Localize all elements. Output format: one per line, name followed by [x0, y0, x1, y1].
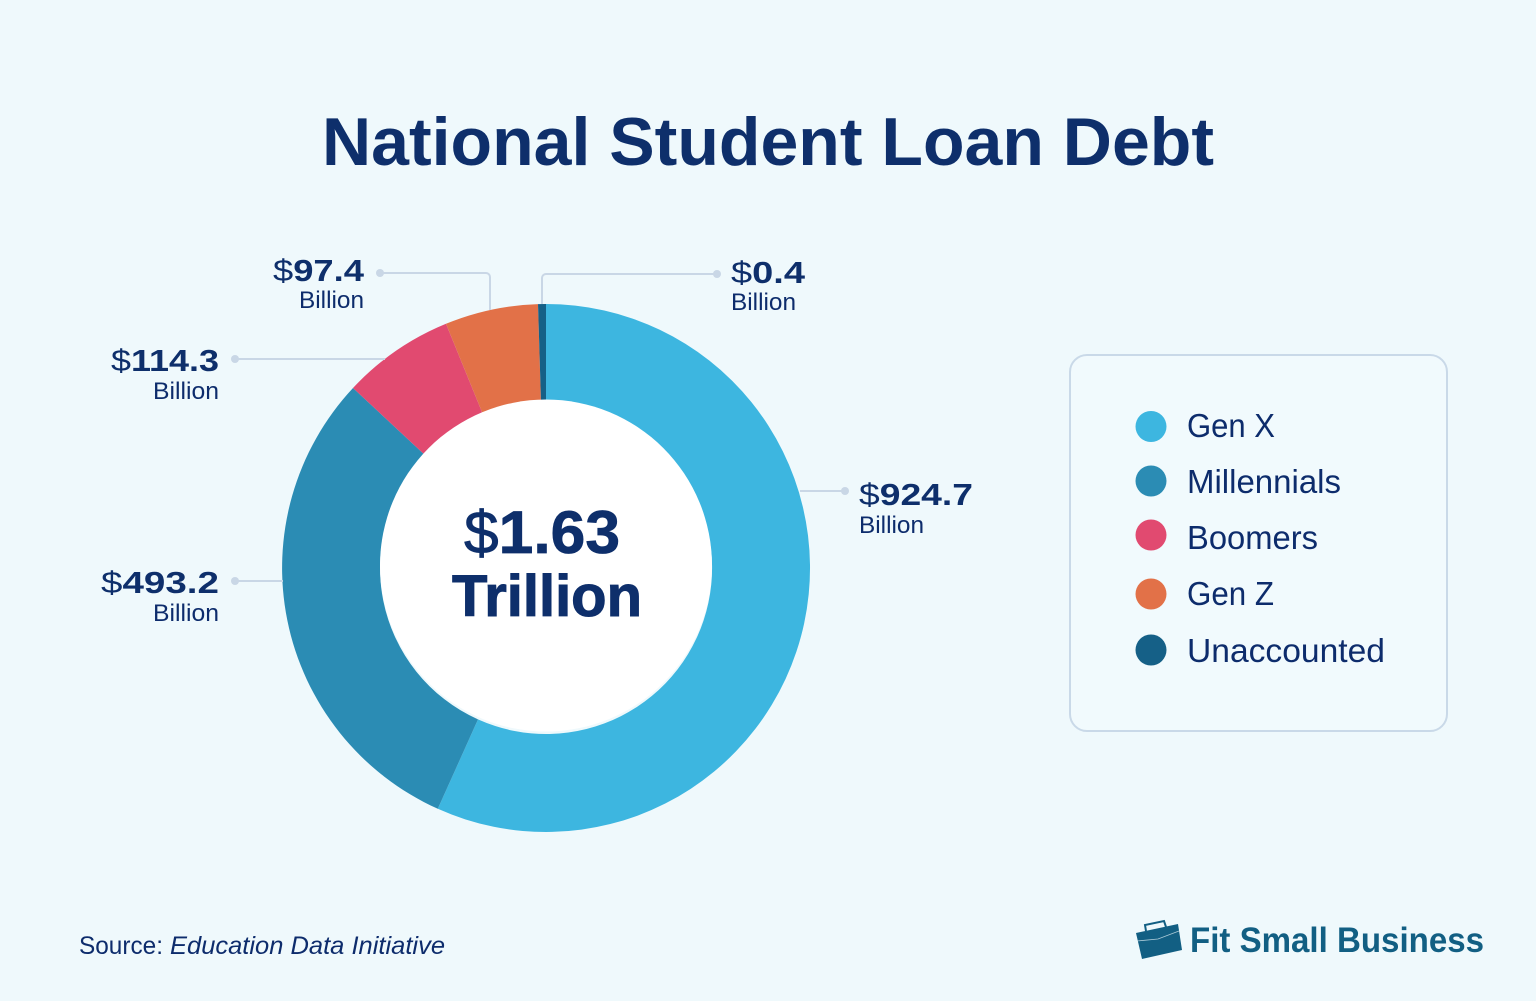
segment: Unaccounted	[538, 304, 546, 402]
donut chart	[282, 304, 810, 832]
legend item: Gen X: Gen X	[1187, 407, 1275, 444]
callout: Boomers $114.3 Billion: $114.3	[111, 343, 219, 378]
callout: Gen X $924.7 Billion: $924.7	[859, 477, 973, 512]
legend item: Millennials: Millennials	[1187, 463, 1341, 500]
center total	[452, 499, 642, 629]
legend panel	[1070, 355, 1447, 731]
callout: Millennials $493.2 Billion: Billion	[153, 600, 219, 627]
callout: Gen X $924.7 Billion: Billion	[859, 512, 924, 539]
callout: Gen Z $97.4 Billion: Billion	[299, 287, 364, 314]
legend item: Boomers: Boomers	[1187, 519, 1318, 556]
icon: briefcase	[1136, 921, 1182, 959]
source note: Education Data Initiative	[170, 932, 445, 960]
source note: Source:	[79, 932, 163, 960]
callout: Gen X $924.7 Billion	[800, 477, 973, 539]
callout: Gen Z $97.4 Billion	[273, 253, 490, 314]
segment: Millennials	[282, 388, 478, 809]
segment: Gen Z	[446, 304, 541, 414]
logo: Fit Small Business: Fit Small Business	[1190, 921, 1484, 960]
callout: Millennials $493.2 Billion: $493.2	[101, 565, 219, 600]
center hole	[380, 400, 712, 732]
segment: Boomers	[353, 324, 483, 455]
legend item: Unaccounted: Unaccounted	[1187, 632, 1385, 669]
segment: Gen X	[438, 304, 810, 832]
legend item: Gen Z	[1136, 575, 1274, 612]
callout: Boomers $114.3 Billion: Billion	[153, 378, 219, 405]
center total: Trillion	[452, 564, 642, 629]
title: National Student Loan Debt	[322, 104, 1214, 180]
callout: Unaccounted $0.4 Billion	[542, 255, 806, 316]
callout: Millennials $493.2 Billion	[101, 565, 283, 627]
callout: Unaccounted $0.4 Billion: Billion	[731, 289, 796, 316]
center total: $1.63	[464, 499, 620, 566]
legend item: Gen X	[1136, 407, 1275, 444]
legend item: Gen Z: Gen Z	[1187, 575, 1274, 612]
callout: Unaccounted $0.4 Billion: $0.4	[731, 255, 806, 290]
callout: Boomers $114.3 Billion	[111, 343, 385, 405]
callout: Gen Z $97.4 Billion: $97.4	[273, 253, 365, 288]
